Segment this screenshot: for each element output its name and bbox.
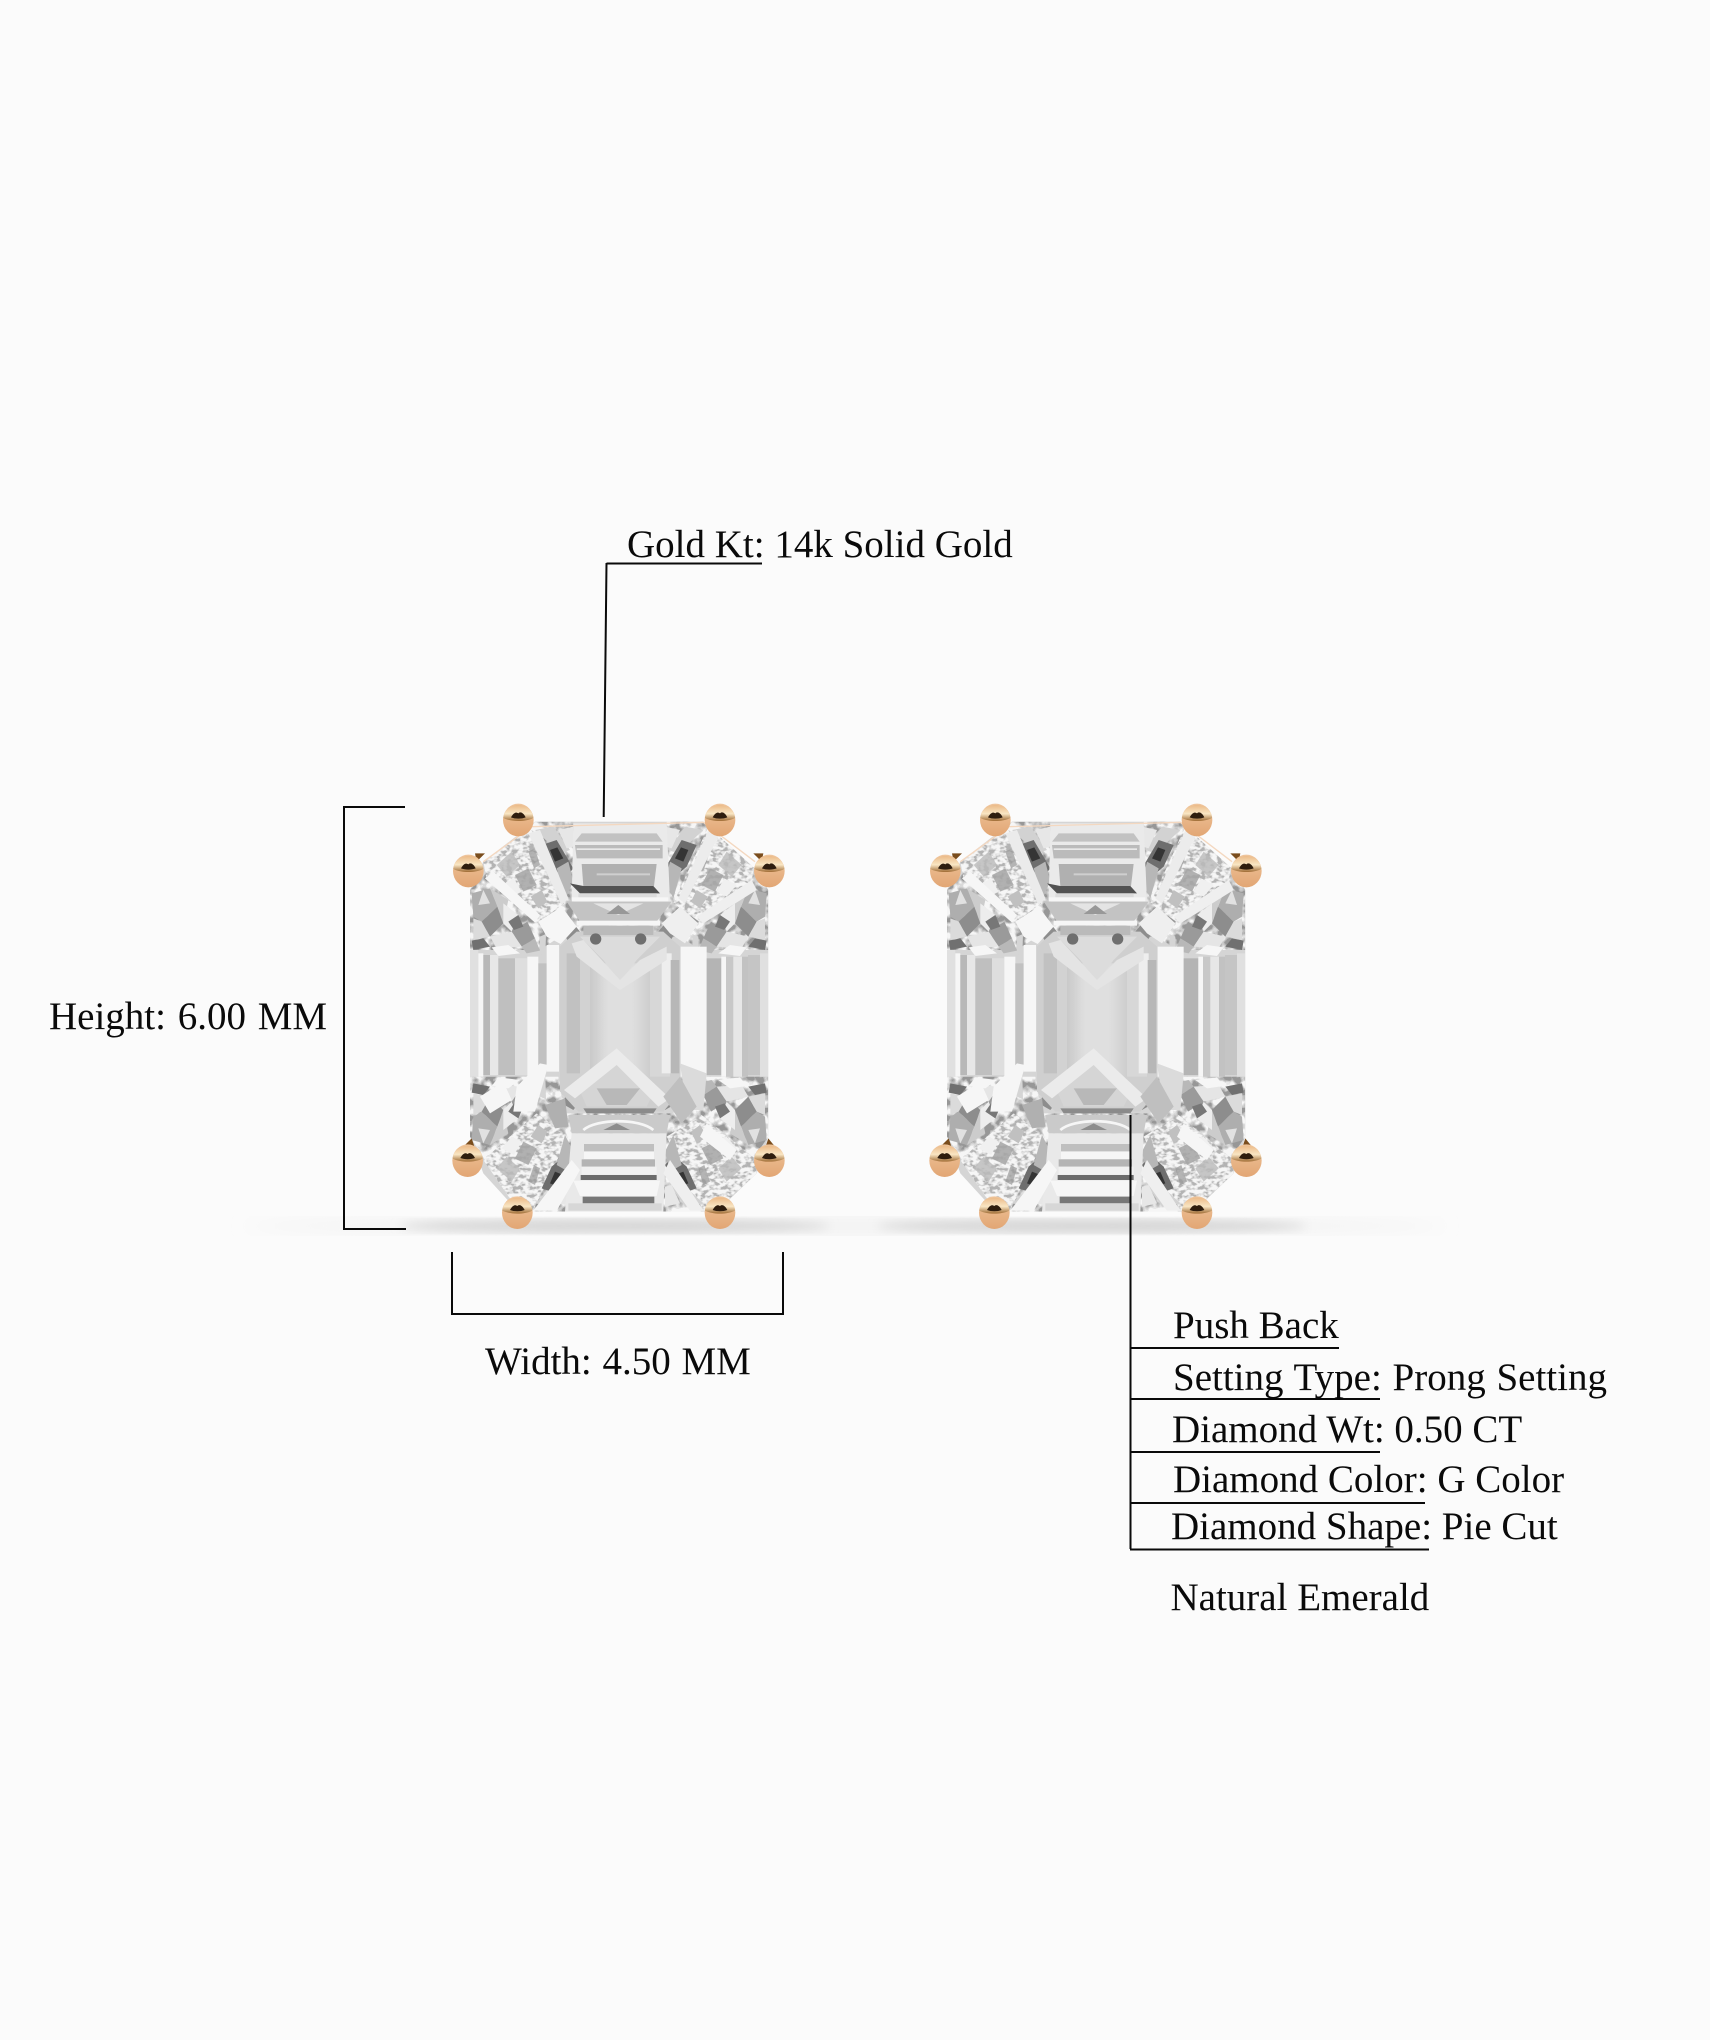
dimension: height bracket [344, 807, 406, 1229]
earring: right stud [929, 804, 1262, 1229]
label: height: Height: 6.00 MM [49, 995, 327, 1038]
dimension: width bracket [452, 1252, 783, 1314]
callout: gold karat: Gold Kt: 14k Solid Gold [627, 523, 1013, 566]
spec: diamond weight: Diamond Wt: 0.50 CT [1172, 1408, 1522, 1451]
leader lines [1130, 1115, 1429, 1550]
spec: setting type: Setting Type: Prong Setting [1173, 1356, 1607, 1399]
spec: center stone: Natural Emerald [1170, 1576, 1430, 1619]
ground shadow [245, 1218, 1445, 1234]
spec: diamond shape: Diamond Shape: Pie Cut [1171, 1505, 1558, 1548]
callout: gold karat [604, 523, 1013, 817]
spec: back type: Push Back [1173, 1304, 1339, 1347]
label: width: Width: 4.50 MM [485, 1340, 751, 1383]
infographic canvas [50, 530, 1606, 1610]
earring: left stud [452, 804, 785, 1229]
callout: specification list [1130, 1115, 1607, 1619]
spec: diamond color: Diamond Color: G Color [1173, 1458, 1564, 1501]
